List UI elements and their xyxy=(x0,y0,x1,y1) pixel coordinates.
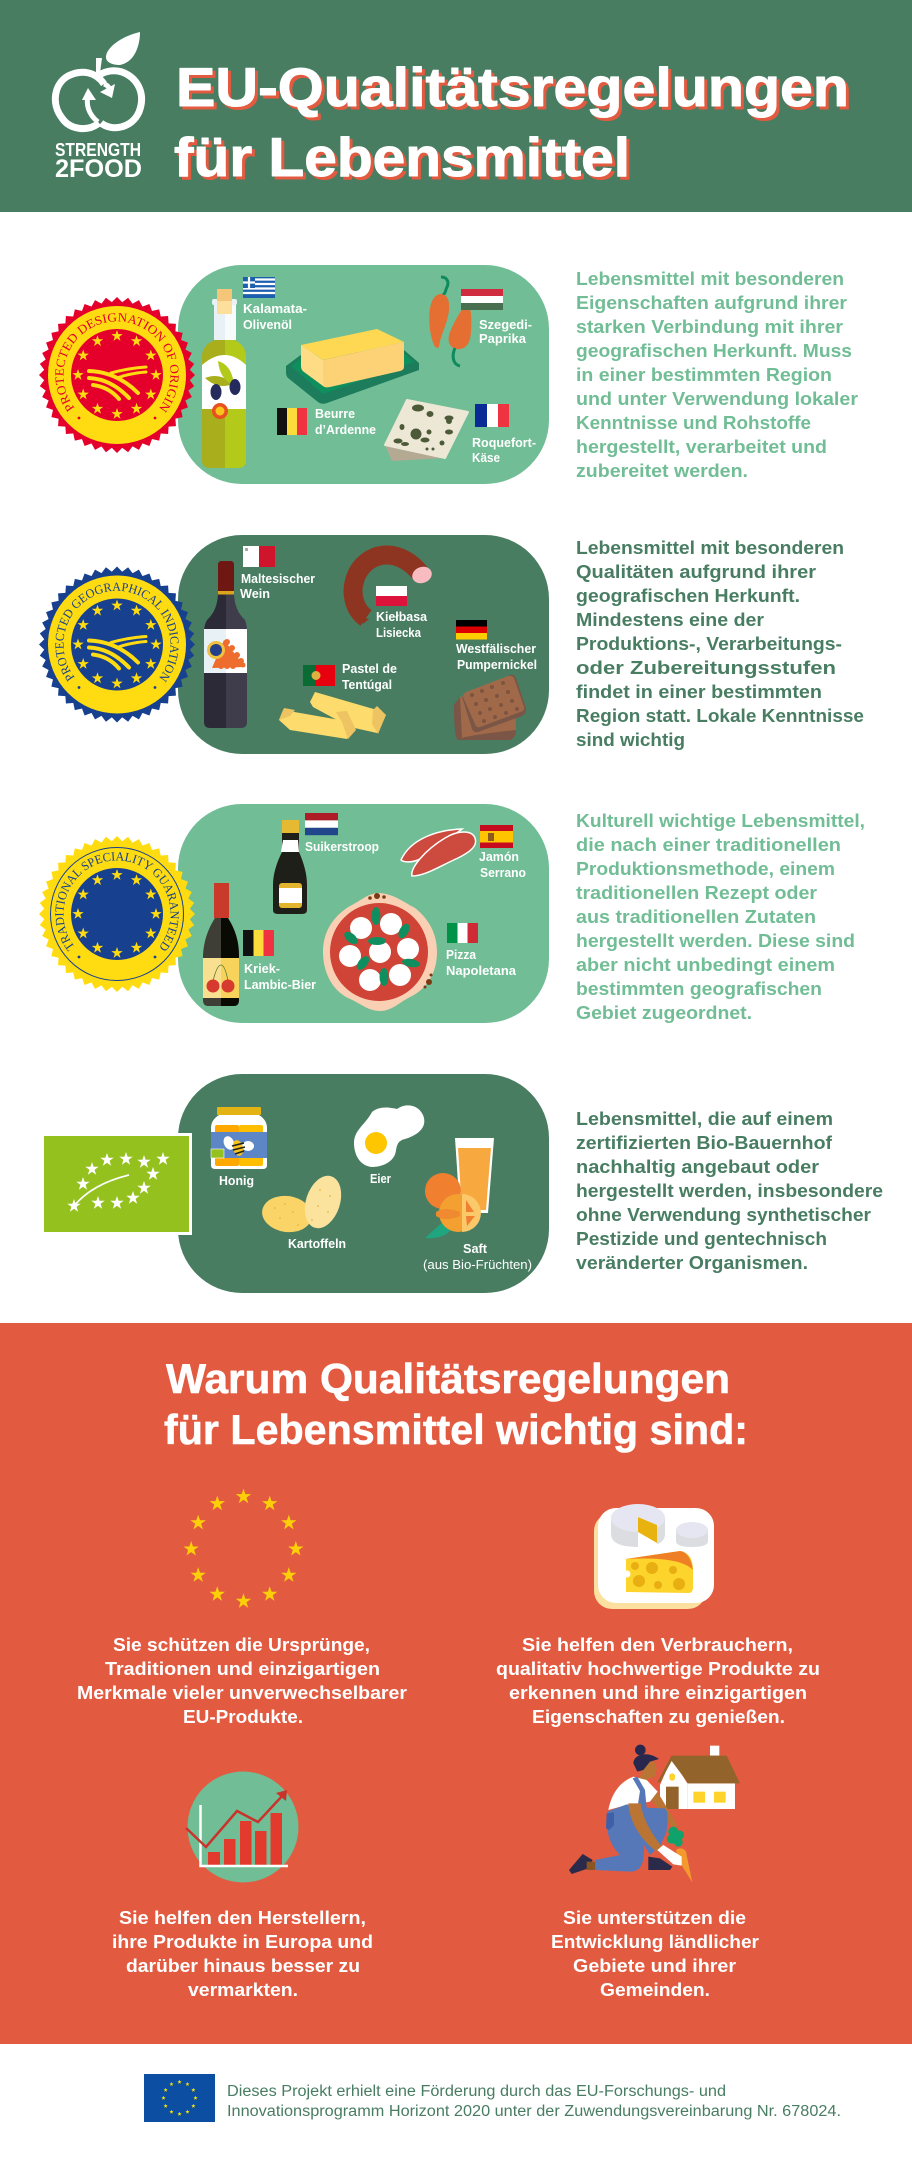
text: origins: EU-Produkte. xyxy=(183,1706,303,1727)
label: Kiełbasa Lisiecka: Lisiecka xyxy=(376,625,422,640)
text block: PGI description: Mindestens eine der xyxy=(576,609,764,630)
text block: TSG description: Produktionsmethode, einem xyxy=(576,858,835,879)
flag: Portugal xyxy=(303,665,335,686)
panel: PGI foods xyxy=(178,535,549,754)
label: Westfälischer Pumpernickel: Pumpernickel xyxy=(457,657,537,672)
heading xyxy=(164,1355,748,1453)
label: Saft (aus Bio-Früchten): Saft xyxy=(463,1241,488,1256)
text: origins: Merkmale vieler unverwechselbarer xyxy=(77,1682,407,1703)
panel: TSG foods xyxy=(178,804,549,1023)
flag: Malta xyxy=(243,546,275,567)
label: Maltesischer Wein: Maltesischer xyxy=(241,571,315,586)
seal: Protected Geographical Indication xyxy=(39,566,195,722)
text block: TSG description: bestimmten geografischen xyxy=(576,978,822,999)
text block: PDO description: Lebensmittel mit besonderen xyxy=(576,268,844,289)
flag: Germany xyxy=(456,620,487,640)
text: producers xyxy=(112,1907,373,2000)
text block: organic description: nachhaltig angebaut oder xyxy=(576,1156,819,1177)
footer text: Dieses Projekt erhielt eine Förderung durch das EU-Forschungs- und xyxy=(227,2083,726,2100)
icon: pumpernickel bread xyxy=(454,675,526,740)
label: Pastel de Tentúgal: Tentúgal xyxy=(342,677,392,692)
text block: PDO description: hergestellt, verarbeitet und xyxy=(576,436,827,457)
label: Kiełbasa Lisiecka xyxy=(376,609,428,640)
footer text: Innovationsprogramm Horizont 2020 unter der Zuwendungsvereinbarung Nr. 678024. xyxy=(227,2103,841,2120)
text block: PGI description: Region statt. Lokale Kenntnisse xyxy=(576,705,864,726)
text block: TSG description: aber nicht unbedingt einem xyxy=(576,954,835,975)
icon: juice and oranges xyxy=(425,1138,494,1238)
flag: Netherlands xyxy=(305,813,338,835)
text: consumers: erkennen und ihre einzigartigen xyxy=(509,1682,807,1703)
logo: Strength2Food xyxy=(55,32,142,183)
icon: farmer and house xyxy=(569,1745,740,1882)
text block: PDO description: in einer bestimmten Region xyxy=(576,364,832,385)
text block: TSG description: hergestellt werden. Diese sind xyxy=(576,930,855,951)
label: Roquefort-Käse xyxy=(472,435,536,465)
text block: organic description: Lebensmittel, die auf einem xyxy=(576,1108,833,1129)
label: Kalamata-Olivenöl: Olivenöl xyxy=(243,317,292,332)
text: producers: vermarkten. xyxy=(188,1979,298,2000)
footer: EU flag xyxy=(144,2074,215,2122)
icon: honey jar xyxy=(211,1107,267,1169)
seal: Traditional Speciality Guaranteed: TRADITIONAL SPECIALITY GUARANTEED xyxy=(55,852,179,952)
label: Pastel de Tentúgal xyxy=(342,661,397,692)
label: Pastel de Tentúgal: Pastel de xyxy=(342,661,397,676)
icon: paprika peppers xyxy=(429,277,471,366)
text block: organic description: zertifizierten Bio-Bauernhof xyxy=(576,1132,833,1153)
icon: potatoes xyxy=(260,1171,348,1235)
text: origins xyxy=(77,1634,407,1727)
icon: Maltese wine bottle xyxy=(204,561,247,728)
label: Kalamata-Olivenöl: Kalamata- xyxy=(243,301,307,316)
label: Jamón Serrano: Serrano xyxy=(480,865,526,880)
text: producers: Sie helfen den Herstellern, xyxy=(119,1907,366,1928)
text block: PGI description: findet in einer bestimmten xyxy=(576,681,822,702)
label: Saft (aus Bio-Früchten): (aus Bio-Früchten) xyxy=(423,1257,532,1272)
icon: cheese plate xyxy=(594,1504,714,1609)
text: rural development: Sie unterstützen die xyxy=(563,1907,746,1928)
icon: olive oil bottle xyxy=(202,289,246,468)
text block: PDO description: und unter Verwendung lokaler xyxy=(576,388,858,409)
flag: Poland xyxy=(376,586,407,606)
title: für Lebensmittel xyxy=(174,126,630,188)
label: Pizza Napoletana: Pizza xyxy=(446,947,477,962)
label: Roquefort-Käse: Roquefort- xyxy=(472,435,536,450)
flag: Belgium xyxy=(243,930,274,956)
heading: Warum Qualitätsregelungen xyxy=(166,1355,730,1402)
footer text xyxy=(227,2083,841,2120)
text: origins: Sie schützen die Ursprünge, xyxy=(113,1634,370,1655)
text: rural development xyxy=(551,1907,759,2000)
label: Westfälischer Pumpernickel xyxy=(456,641,537,672)
label: Szegedi-Paprika xyxy=(479,317,532,346)
icon: butter on dish xyxy=(286,329,419,404)
text block: TSG description: traditionellen Rezept oder xyxy=(576,882,817,903)
label: Saft (aus Bio-Früchten) xyxy=(423,1241,532,1272)
text: rural development: Gemeinden. xyxy=(600,1979,710,2000)
text: producers: darüber hinaus besser zu xyxy=(126,1955,360,1976)
text block: TSG description: aus traditionellen Zutaten xyxy=(576,906,816,927)
logo: Strength2Food: STRENGTH xyxy=(55,140,141,160)
label: Szegedi-Paprika: Paprika xyxy=(479,331,527,346)
flag: Spain xyxy=(480,825,513,848)
label: Kiełbasa Lisiecka: Kiełbasa xyxy=(376,609,428,624)
label: Jamón Serrano xyxy=(479,849,526,880)
text block: organic description xyxy=(576,1108,883,1273)
text block: PDO description: geografischen Herkunft. Muss xyxy=(576,340,852,361)
icon: pizza xyxy=(323,893,437,1011)
text block: PDO description: Kenntnisse und Rohstoffe xyxy=(576,412,811,433)
text block: organic description: hergestellt werden, insbesondere xyxy=(576,1180,883,1201)
logo: EU organic leaf xyxy=(44,1133,192,1235)
flag: Italy xyxy=(447,923,478,943)
icon: sausage xyxy=(353,555,434,624)
label: Jamón Serrano: Jamón xyxy=(479,849,519,864)
text block: PGI description: oder Zubereitungsstufen xyxy=(576,657,836,678)
text block: PGI description xyxy=(576,537,864,750)
label: Pizza Napoletana: Napoletana xyxy=(446,963,517,978)
label: Kartoffeln: Kartoffeln xyxy=(288,1236,346,1251)
seal: Protected Designation of Origin xyxy=(39,297,195,453)
text block: PDO description xyxy=(576,268,858,481)
text block: PDO description: zubereitet werden. xyxy=(576,460,748,481)
heading: für Lebensmittel wichtig sind: xyxy=(164,1406,748,1453)
seal: Protected Designation of Origin: PROTECTED DESIGNATION OF ORIGIN xyxy=(55,313,179,413)
label: Szegedi-Paprika: Szegedi- xyxy=(479,317,532,332)
label: Kriek-Lambic-Bier: Kriek- xyxy=(244,961,280,976)
label: Kriek-Lambic-Bier: Lambic-Bier xyxy=(244,977,316,992)
flag: France xyxy=(475,404,509,427)
text block: TSG description: die nach einer traditionellen xyxy=(576,834,841,855)
label: Roquefort-Käse: Käse xyxy=(472,450,500,465)
label: Eier: Eier xyxy=(370,1171,391,1186)
text block: TSG description: Gebiet zugeordnet. xyxy=(576,1002,752,1023)
icon: Roquefort cheese xyxy=(385,400,468,461)
text: rural development: Entwicklung ländlicher xyxy=(551,1931,759,1952)
icon: syrup bottle xyxy=(273,820,307,914)
label: Maltesischer Wein: Wein xyxy=(240,586,270,601)
text block: PGI description: sind wichtig xyxy=(576,729,685,750)
text block: PGI description: Lebensmittel mit besonderen xyxy=(576,537,844,558)
seal: Protected Geographical Indication: PROTECTED GEOGRAPHICAL INDICATION xyxy=(55,582,179,683)
text block: organic description: veränderter Organismen. xyxy=(576,1252,808,1273)
title xyxy=(174,56,849,188)
title: EU-Qualitätsregelungen xyxy=(176,56,849,118)
text: producers: ihre Produkte in Europa und xyxy=(112,1931,373,1952)
icon: EU stars xyxy=(183,1489,304,1608)
text block: TSG description: Kulturell wichtige Lebensmittel, xyxy=(576,810,865,831)
text block: PGI description: geografischen Herkunft. xyxy=(576,585,800,606)
label: Beurre d'Ardenne: d’Ardenne xyxy=(315,422,376,437)
text: consumers xyxy=(496,1634,820,1727)
text block: organic description: Pestizide und gentechnisch xyxy=(576,1228,827,1249)
text block: PDO description: starken Verbindung mit ihrer xyxy=(576,316,843,337)
label: Beurre d'Ardenne xyxy=(315,406,376,437)
text: consumers: Sie helfen den Verbrauchern, xyxy=(522,1634,793,1655)
text block: PGI description: Produktions-, Verarbeitungs- xyxy=(576,633,842,654)
label: Maltesischer Wein xyxy=(240,571,315,601)
icon: growth chart xyxy=(186,1772,298,1882)
label: Kriek-Lambic-Bier xyxy=(244,961,316,992)
icon: ham slices xyxy=(401,829,476,876)
text: rural development: Gebiete und ihrer xyxy=(573,1955,736,1976)
text: origins: Traditionen und einzigartigen xyxy=(105,1658,380,1679)
icon: fried egg xyxy=(354,1105,424,1167)
header band xyxy=(0,0,912,212)
label: Pizza Napoletana xyxy=(446,947,517,978)
label: Westfälischer Pumpernickel: Westfälischer xyxy=(456,641,536,656)
text block: PGI description: Qualitäten aufgrund ihrer xyxy=(576,561,816,582)
label: Suikerstroop: Suikerstroop xyxy=(305,839,379,854)
text block: PDO description: Eigenschaften aufgrund ihrer xyxy=(576,292,847,313)
text: consumers: qualitativ hochwertige Produkte zu xyxy=(496,1658,820,1679)
flag: Greece xyxy=(243,277,275,298)
icon: Kriek beer bottle xyxy=(203,883,239,1006)
panel: organic foods xyxy=(178,1074,549,1293)
label: Kalamata-Olivenöl xyxy=(243,301,307,332)
panel: why quality schemes matter xyxy=(0,1323,912,2044)
panel: PDO foods xyxy=(178,265,549,484)
text block: TSG description xyxy=(576,810,865,1023)
text block: organic description: ohne Verwendung synthetischer xyxy=(576,1204,871,1225)
label: Honig: Honig xyxy=(219,1173,254,1188)
text: consumers: Eigenschaften zu genießen. xyxy=(532,1706,785,1727)
seal: Traditional Speciality Guaranteed xyxy=(39,836,195,992)
icon: pastries xyxy=(279,692,386,739)
logo: Strength2Food: 2FOOD xyxy=(55,155,142,183)
label: Beurre d'Ardenne: Beurre xyxy=(315,406,355,421)
flag: Belgium xyxy=(277,408,307,435)
flag: Hungary xyxy=(461,289,503,310)
